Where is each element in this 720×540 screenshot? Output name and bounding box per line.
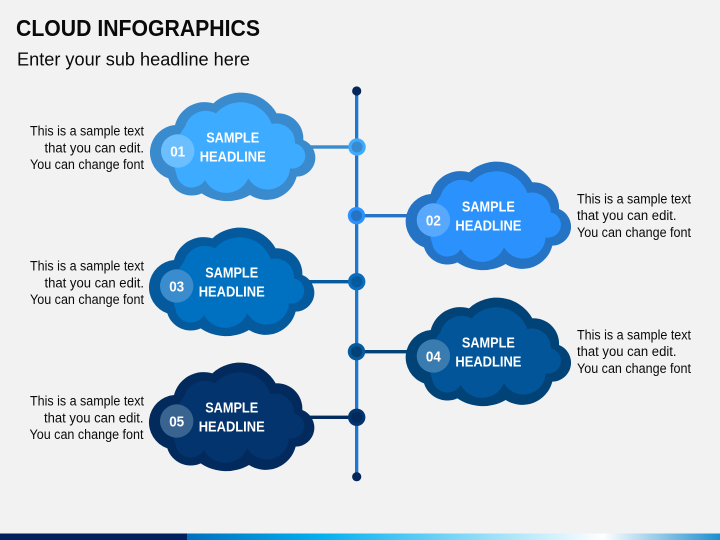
timeline spine (352, 86, 361, 481)
connector and node 02 (348, 207, 412, 224)
cloud 03: SAMPLE (205, 265, 258, 281)
cloud 05: 05 (169, 414, 184, 430)
text block 02: that you can edit. (577, 208, 676, 223)
text block 04 (577, 328, 691, 376)
cloud 01: 01 (170, 144, 185, 160)
text block 05: This is a sample text (30, 394, 144, 409)
text block 01: that you can edit. (44, 140, 144, 155)
subtitle: Enter your sub headline here (17, 48, 250, 70)
text block 05: You can change font (30, 427, 144, 442)
text block 04: You can change font (577, 361, 691, 376)
text block 02 (577, 192, 691, 240)
cloud 02: 02 (426, 214, 441, 230)
text block 01 (30, 124, 144, 172)
connector and node 01 (300, 138, 366, 156)
text block 05: that you can edit. (44, 410, 144, 425)
cloud 04: 04 (426, 350, 441, 366)
text block 03 (30, 259, 144, 307)
cloud 01: HEADLINE (200, 150, 266, 166)
cloud 02: SAMPLE (462, 199, 515, 215)
text block 05 (30, 394, 144, 442)
cloud 02: HEADLINE (455, 219, 522, 235)
connector and node 05 (300, 409, 365, 426)
connector and node 03 (300, 273, 365, 290)
cloud 04: HEADLINE (455, 355, 522, 371)
title: CLOUD INFOGRAPHICS (16, 15, 260, 41)
text block 04: that you can edit. (577, 344, 676, 359)
cloud 03: 03 (169, 280, 184, 296)
bottom colour bar (0, 534, 720, 540)
cloud 05: SAMPLE (205, 400, 258, 416)
connector and node 04 (348, 343, 412, 360)
cloud 02 (406, 162, 571, 270)
text block 01: This is a sample text (30, 124, 144, 139)
cloud 01 (150, 93, 315, 201)
text block 02: This is a sample text (577, 192, 691, 206)
cloud 04: SAMPLE (462, 335, 515, 351)
text block 02: You can change font (577, 225, 691, 240)
text block 01: You can change font (30, 157, 144, 172)
cloud 05 (149, 363, 314, 471)
cloud 01: SAMPLE (206, 130, 259, 146)
cloud 03: HEADLINE (199, 285, 265, 301)
cloud 04 (406, 298, 571, 406)
text block 03: This is a sample text (30, 259, 144, 274)
cloud 05: HEADLINE (199, 420, 265, 436)
cloud 03 (149, 228, 314, 336)
text block 03: You can change font (30, 292, 144, 307)
text block 04: This is a sample text (577, 328, 691, 342)
text block 03: that you can edit. (44, 275, 144, 290)
